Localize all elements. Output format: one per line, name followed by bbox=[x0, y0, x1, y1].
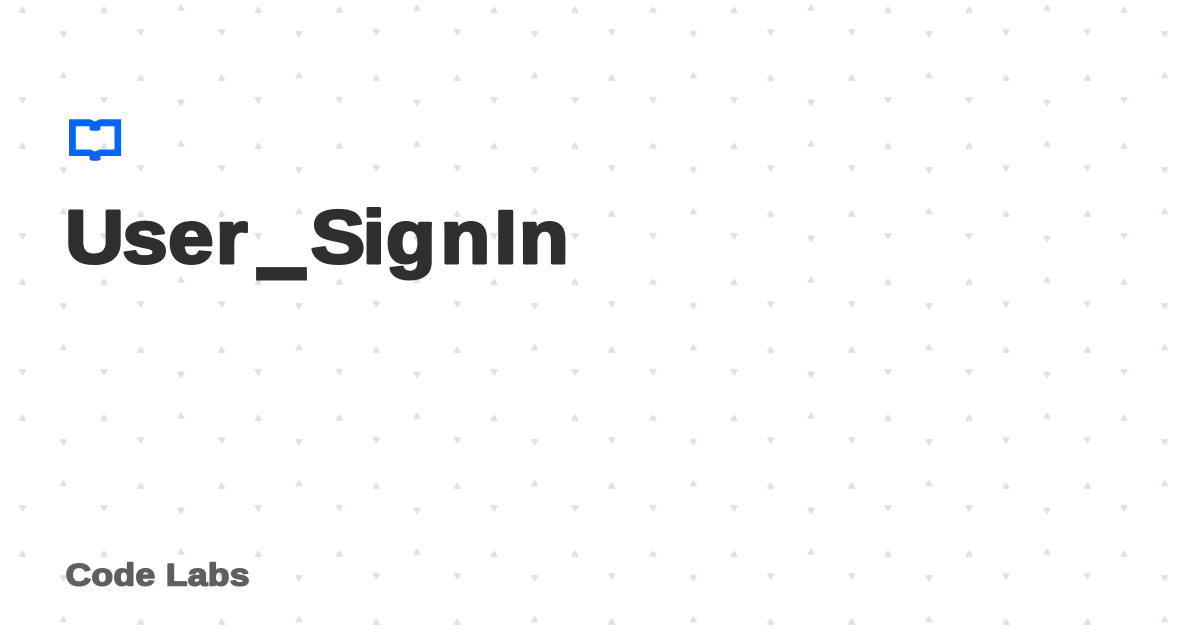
title: _ bbox=[262, 211, 301, 281]
title: SignIn bbox=[311, 195, 569, 279]
icon: open book bbox=[69, 119, 121, 161]
title: User bbox=[65, 195, 248, 279]
brand name: Code Labs bbox=[66, 558, 250, 593]
